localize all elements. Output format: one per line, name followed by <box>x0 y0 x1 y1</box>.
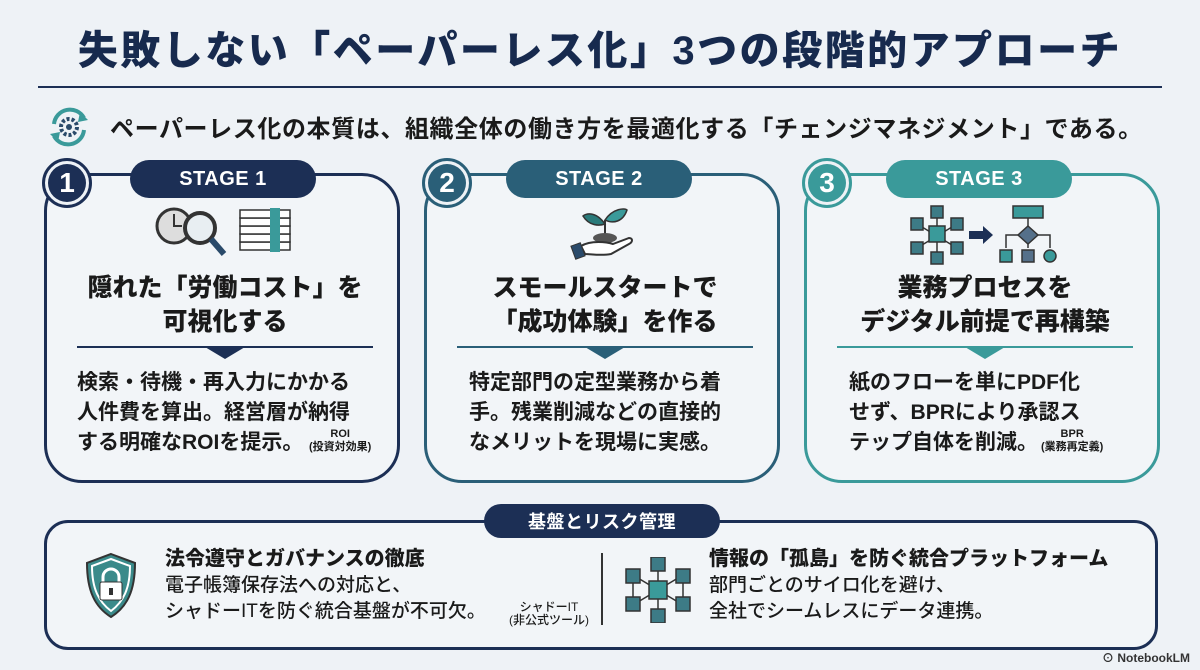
icon: plant in hand <box>570 208 633 260</box>
note: (投資対効果) <box>309 441 371 453</box>
icon: network to flowchart <box>910 205 1057 265</box>
icon: network cubes <box>625 557 691 623</box>
body text: 特定部門の定型業務から着 <box>469 371 721 394</box>
body text: テップ自体を削減。 <box>849 431 1038 454</box>
subtitle: ペーパーレス化の本質は、組織全体の働き方を最適化する「チェンジマネジメント」である。 <box>110 116 1143 143</box>
heading: 可視化する <box>162 308 288 336</box>
icon: gear cycle <box>50 108 88 146</box>
body text <box>849 370 1080 454</box>
note <box>309 428 371 453</box>
icon: shield <box>86 552 136 618</box>
note: (非公式ツール) <box>509 613 589 627</box>
note: BPR <box>1061 428 1084 440</box>
icon: clock, magnifier, papers <box>156 208 291 256</box>
pill: stage 1: STAGE 1 <box>179 168 267 190</box>
note: ROI <box>330 428 350 440</box>
pill: stage 3 <box>886 160 1072 198</box>
watermark: ⊙ NotebookLM <box>1102 651 1190 665</box>
title: 失敗しない「ペーパーレス化」3つの段階的アプローチ <box>78 29 1122 73</box>
body text <box>469 370 721 454</box>
body text: する明確なROIを提示。 <box>77 431 303 454</box>
badge: 3: 3 <box>819 167 835 198</box>
panel: stage 1 <box>44 173 400 483</box>
pill: stage 1 <box>130 160 316 198</box>
panel: stage 3 <box>804 173 1160 483</box>
panel: foundation and risk <box>44 520 1158 650</box>
text: platform: 部門ごとのサイロ化を避け、 <box>709 575 955 596</box>
text: compliance: 電子帳簿保存法への対応と、 <box>165 575 411 596</box>
badge: 3 <box>802 158 852 208</box>
body text: 手。残業削減などの直接的 <box>469 401 721 424</box>
text: compliance: 法令遵守とガバナンスの徹底 <box>165 548 425 570</box>
heading: スモールスタートで <box>492 274 718 302</box>
note: シャドーIT <box>520 600 578 614</box>
badge: 2 <box>422 158 472 208</box>
text: platform <box>709 548 1108 622</box>
badge: 1: 1 <box>59 167 75 198</box>
text: compliance: シャドーITを防ぐ統合基盤が不可欠。 <box>165 601 486 622</box>
note <box>1041 428 1103 453</box>
heading <box>860 274 1110 336</box>
text: platform: 情報の「孤島」を防ぐ統合プラットフォーム <box>709 548 1108 570</box>
heading: 「成功体験」を作る <box>492 308 718 336</box>
heading <box>87 274 362 336</box>
text: compliance <box>165 548 486 622</box>
body text: 人件費を算出。経営層が納得 <box>77 401 350 424</box>
heading: 業務プロセスを <box>897 274 1072 302</box>
pill: foundation heading: 基盤とリスク管理 <box>528 512 676 532</box>
pill: stage 2: STAGE 2 <box>555 168 643 190</box>
panel: stage 2 <box>424 173 780 483</box>
badge: 1 <box>42 158 92 208</box>
heading <box>492 274 718 336</box>
body text: 検索・待機・再入力にかかる <box>77 371 350 394</box>
note <box>509 600 589 627</box>
body text: なメリットを現場に実感。 <box>469 431 721 454</box>
badge: 2: 2 <box>439 167 455 198</box>
note: (業務再定義) <box>1041 441 1103 453</box>
pill: stage 2 <box>506 160 692 198</box>
heading: 隠れた「労働コスト」を <box>87 274 362 302</box>
text: platform: 全社でシームレスにデータ連携。 <box>709 601 993 622</box>
heading: デジタル前提で再構築 <box>860 308 1110 336</box>
body text <box>77 370 350 454</box>
body text: せず、BPRにより承認ス <box>849 401 1080 424</box>
pill: stage 3: STAGE 3 <box>935 168 1023 190</box>
pill: foundation heading <box>484 504 720 538</box>
body text: 紙のフローを単にPDF化 <box>849 371 1080 394</box>
